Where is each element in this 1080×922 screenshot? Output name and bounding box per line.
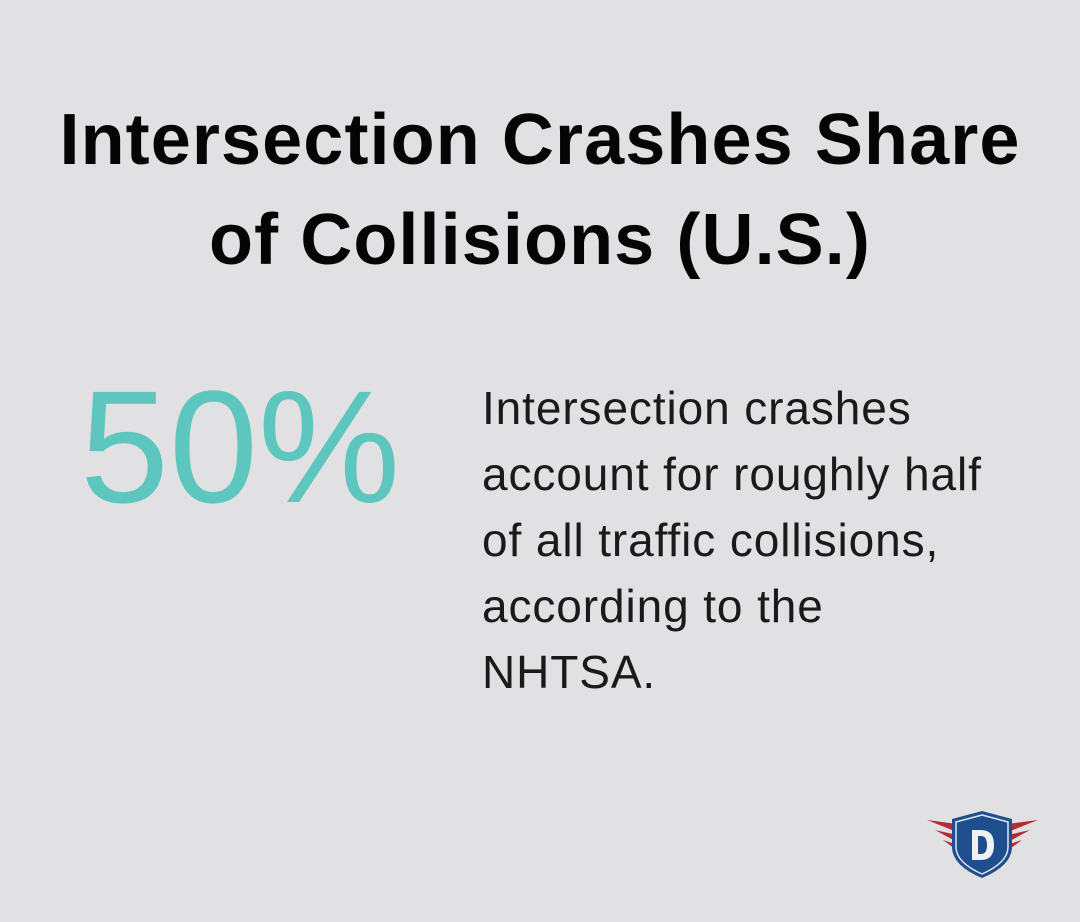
description text: of all traffic collisions,	[482, 514, 939, 566]
title: Intersection Crashes Share	[60, 100, 1020, 180]
shield	[952, 811, 1012, 878]
icon: logo shield with wings	[927, 811, 1038, 878]
title	[60, 100, 1020, 280]
description text	[482, 382, 982, 698]
stat: 50%: 50%	[80, 357, 400, 536]
wings	[927, 820, 1038, 851]
description text: Intersection crashes	[482, 382, 912, 434]
description text: NHTSA.	[482, 646, 656, 698]
title: of Collisions (U.S.)	[209, 200, 871, 280]
description text: according to the	[482, 580, 824, 632]
description text: account for roughly half	[482, 448, 982, 500]
